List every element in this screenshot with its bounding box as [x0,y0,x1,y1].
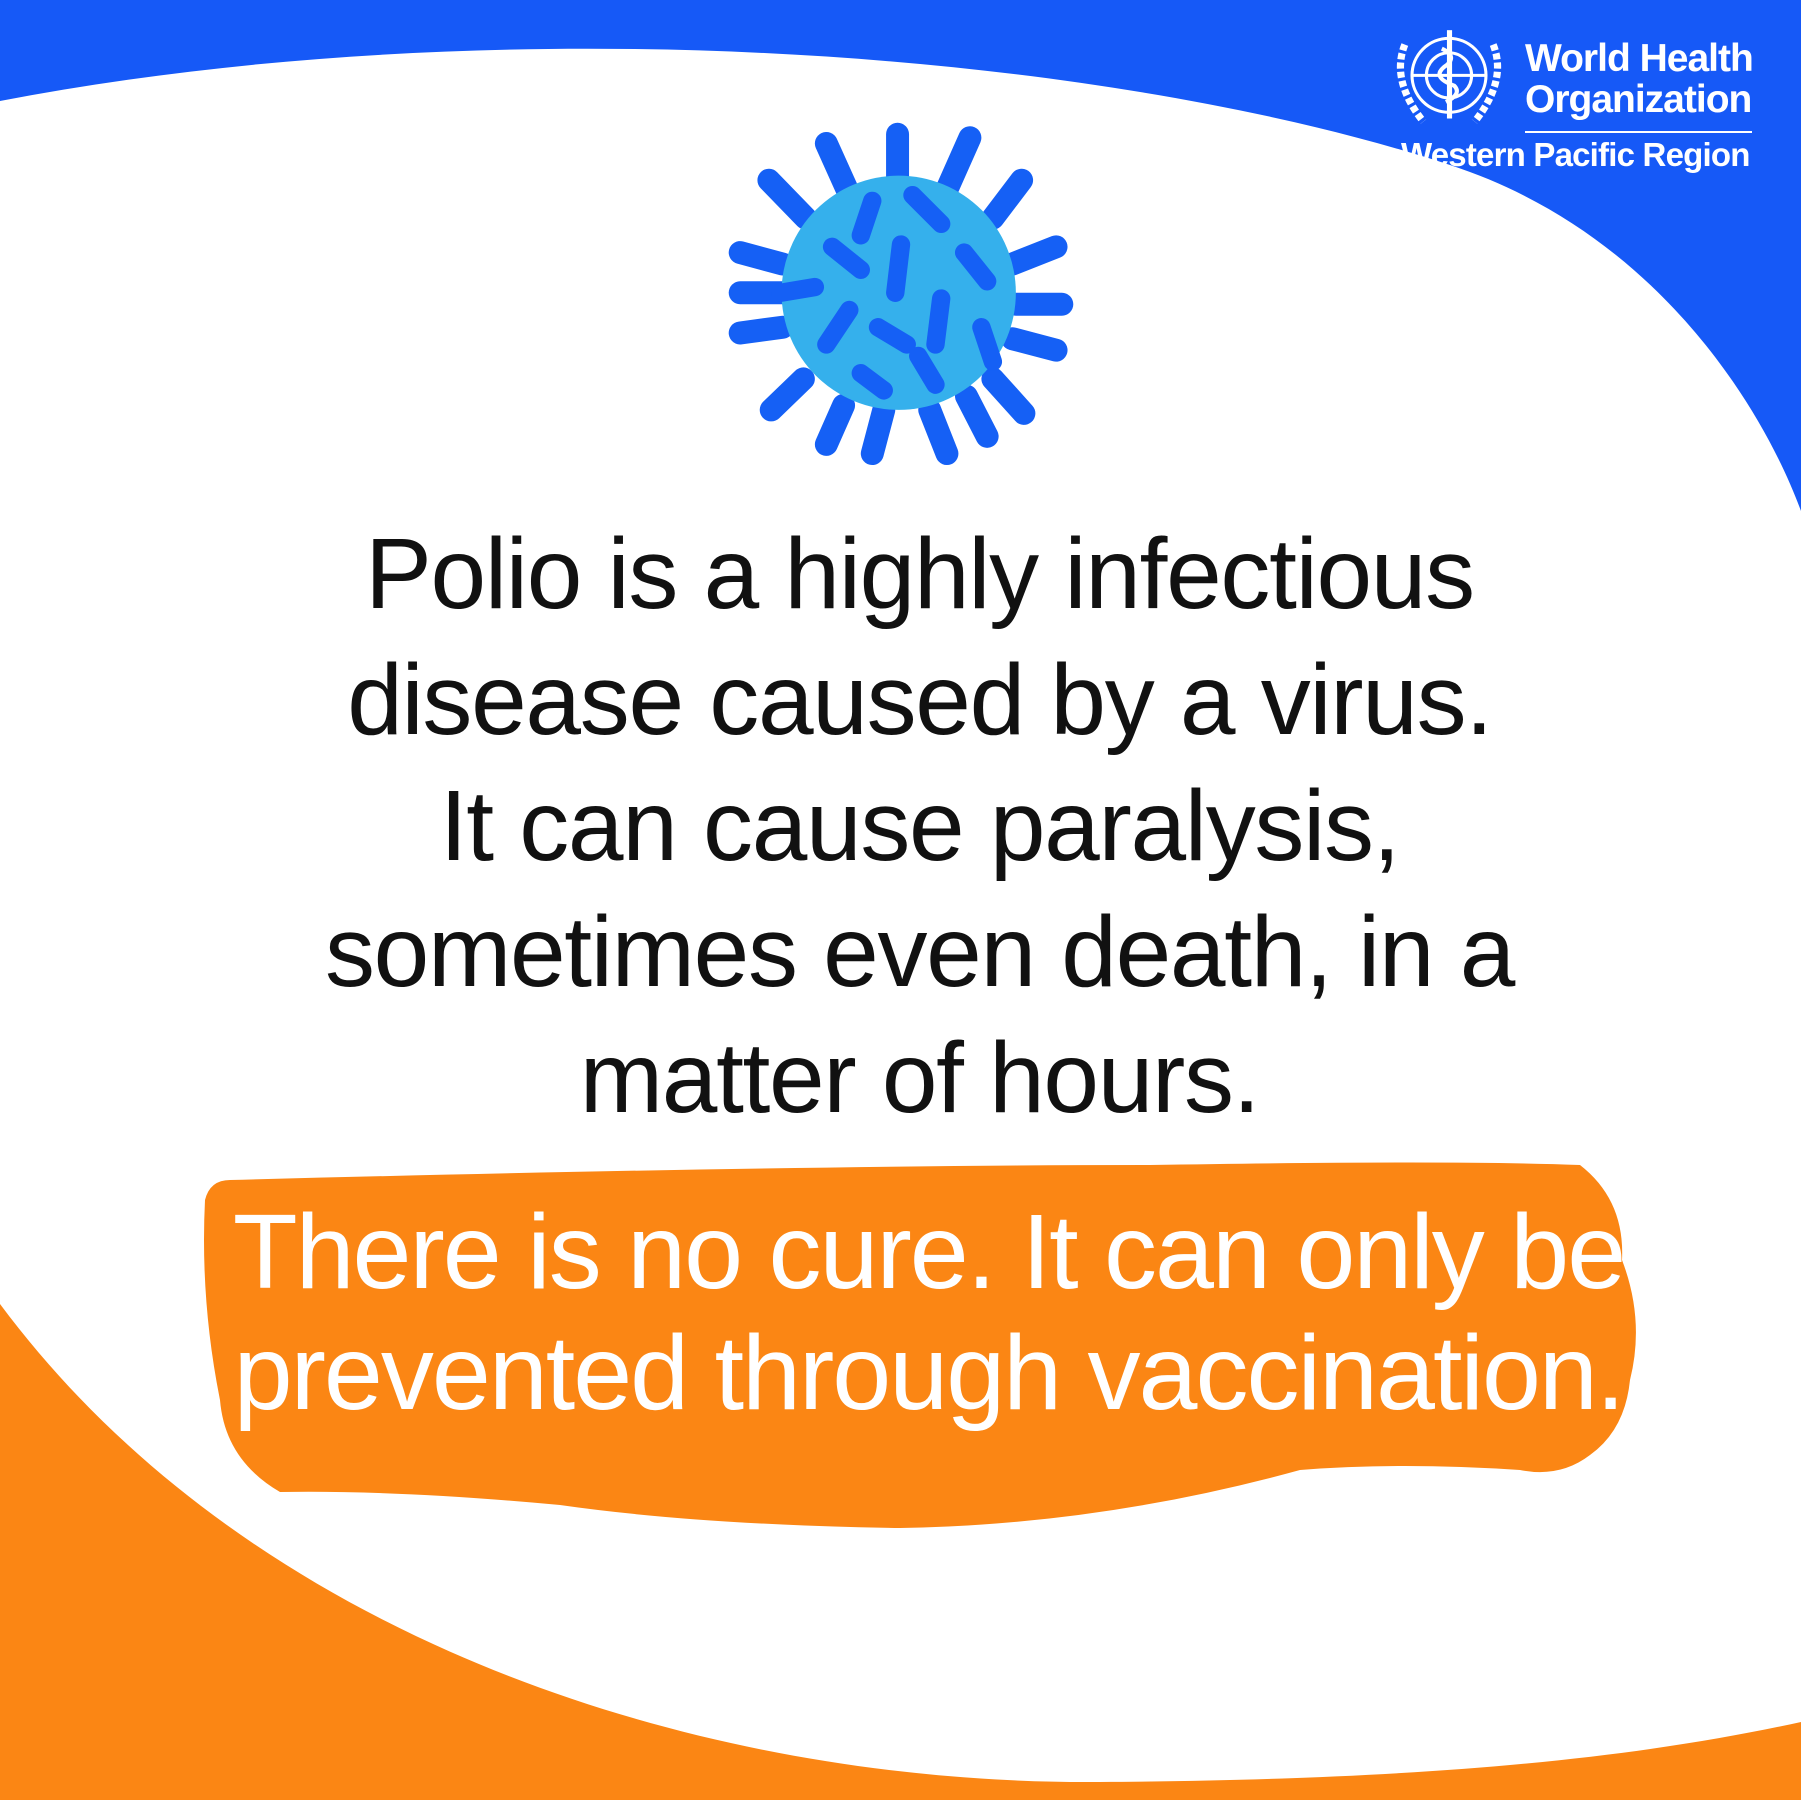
text block: polio description: disease caused by a virus. [347,644,1492,756]
text: organization name [1525,37,1753,121]
callout: orange highlight box [204,1162,1636,1528]
text block: polio description: It can cause paralysis, [440,770,1399,882]
logo: WHO Western Pacific Region: Western Pacific Region [1401,136,1750,173]
text: vaccination message: prevented through vaccination. [234,1314,1623,1432]
icon: polio virus [728,122,1074,465]
shape: orange brush blob [204,1162,1636,1528]
text block: polio description: sometimes even death, in a [325,896,1514,1008]
text block: polio description: Polio is a highly infectious [365,518,1474,630]
icon: WHO emblem [1396,30,1502,124]
logo: WHO Western Pacific Region [1396,30,1753,173]
text block: polio description: matter of hours. [580,1022,1259,1134]
text: vaccination message [233,1193,1624,1432]
text: organization name: World Health [1525,37,1753,80]
text block: polio description [325,518,1516,1134]
text: vaccination message: There is no cure. It can only be [233,1193,1624,1311]
text: organization name: Organization [1525,78,1751,121]
